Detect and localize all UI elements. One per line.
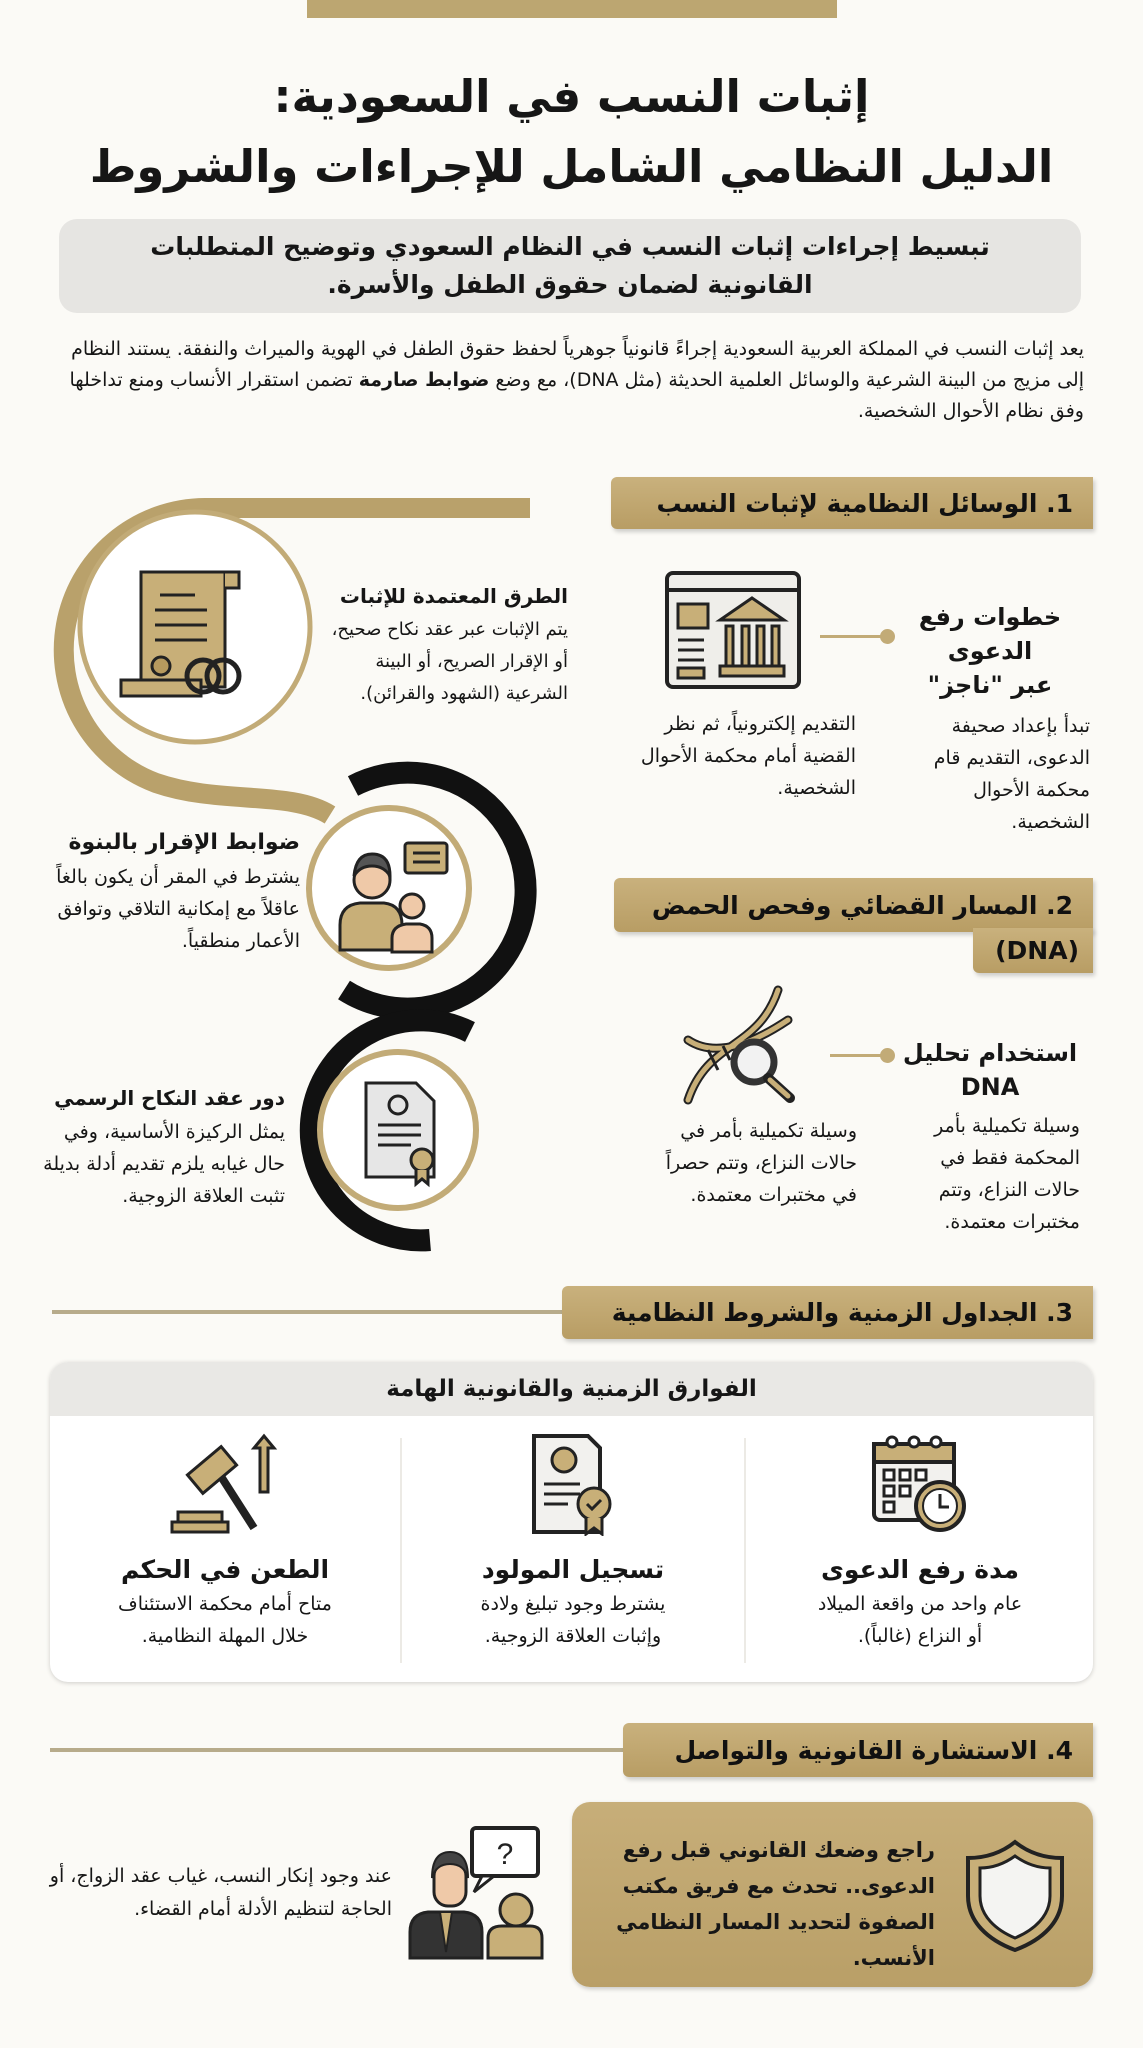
text: marriage contract role: دور عقد النكاح الرسمي — [54, 1086, 285, 1110]
icon: DNA with magnifier — [684, 986, 795, 1104]
circle 3 — [320, 1052, 476, 1208]
section 2 header: 2. المسار القضائي وفحص الحمض — [652, 890, 1073, 920]
section 3 divider line — [52, 1310, 564, 1314]
intro paragraph: يعد إثبات النسب في المملكة العربية السعودية إجراءً قانونياً جوهرياً لحفظ حقوق الطفل في الهوية والميراث والنفقة. يستند النظام إلى مزيج من البينة الشرعية والوسائل العلمية الحديثة (مثل DNA)، مع وضع ضوابط صارمة تضمن استقرار الأنساب ومنع تداخلها وفق نظام الأحوال الشخصية. — [69, 338, 1084, 422]
card text: راجع وضعك القانوني قبل رفع الدعوى.. تحدث مع فريق مكتب الصفوة لتحديد المسار النظامي الأنسب. — [616, 1838, 935, 1970]
section 2 header — [614, 878, 1098, 978]
text: electronic submission: التقديم إلكترونياً، ثم نظر القضية أمام محكمة الأحوال الشخصية. — [641, 713, 856, 799]
black arc circle 2 — [344, 773, 526, 1009]
text: acknowledgment rules: يشترط في المقر أن يكون بالغاً عاقلاً مع إمكانية التلاقي وتوافق الأعمار منطقياً. — [56, 866, 300, 952]
column: filing period: أو النزاع (غالباً). — [858, 1625, 982, 1647]
icon: shield — [966, 1840, 1064, 1952]
text: najiz steps — [919, 603, 1090, 833]
title: إثبات النسب في السعودية: — [274, 70, 869, 123]
column: filing period — [818, 1436, 1022, 1647]
title: الدليل النظامي الشامل للإجراءات والشروط — [90, 140, 1053, 193]
text: acknowledgment rules: ضوابط الإقرار بالبنوة — [69, 830, 300, 855]
black arc circle 3 — [311, 1020, 470, 1240]
text: DNA usage: وسيلة تكميلية بأمر المحكمة فقط في حالات النزاع، وتتم مختبرات معتمدة. — [934, 1115, 1080, 1233]
circle 2 — [309, 808, 469, 968]
card header: الفوارق الزمنية والقانونية الهامة — [386, 1376, 757, 1402]
text: approved methods: يتم الإثبات عبر عقد نكاح صحيح، أو الإقرار الصريح، أو البينة الشرعية (الشهود والقرائن). — [332, 619, 568, 704]
column: birth registration: تسجيل المولود — [482, 1555, 664, 1584]
column: birth registration: وإثبات العلاقة الزوجية. — [485, 1625, 661, 1647]
icon: document with badge — [532, 1434, 612, 1536]
icon: scroll with rings — [121, 572, 239, 696]
card header — [50, 1362, 1093, 1416]
icon: calendar clock — [872, 1436, 966, 1532]
section 4 header — [623, 1723, 1093, 1777]
gold consultation card — [572, 1802, 1093, 1987]
subtitle box: القانونية لضمان حقوق الطفل والأسرة. — [327, 270, 813, 299]
gold band — [64, 508, 530, 815]
top gold bar — [307, 0, 837, 18]
section 2 header: (DNA) — [995, 936, 1079, 965]
text: najiz steps: تبدأ بإعداد صحيفة الدعوى، التقديم قام محكمة الأحوال الشخصية. — [934, 715, 1090, 833]
connector 2 — [830, 1054, 886, 1057]
column: appeal: خلال المهلة النظامية. — [142, 1625, 308, 1647]
icon: parent and child — [340, 843, 447, 952]
text: DNA usage: استخدام تحليل — [903, 1039, 1077, 1067]
text: najiz steps: الدعوى — [948, 637, 1032, 665]
text: najiz steps: عبر "ناجز" — [928, 671, 1052, 699]
circle 1 — [80, 512, 310, 742]
section 4 header: 4. الاستشارة القانونية والتواصل — [674, 1736, 1073, 1764]
icon: lawyer with client — [408, 1826, 544, 1960]
section 4 divider line — [50, 1748, 625, 1752]
connector 1 — [820, 635, 884, 638]
text: DNA usage — [903, 1039, 1080, 1233]
column: filing period: مدة رفع الدعوى — [821, 1555, 1019, 1584]
text: when to consult: عند وجود إنكار النسب، غياب عقد الزواج، أو الحاجة لتنظيم الأدلة أمام القضاء. — [50, 1865, 392, 1920]
icon: lawyer with client: ? — [497, 1838, 513, 1871]
icon: certificate — [366, 1083, 434, 1184]
column: filing period: عام واحد من واقعة الميلاد — [818, 1593, 1022, 1615]
text: marriage contract role: يمثل الركيزة الأساسية، وفي حال غيابه يلزم تقديم أدلة بديلة تثبت العلاقة الزوجية. — [43, 1121, 285, 1207]
text: DNA supplementary: وسيلة تكميلية بأمر في حالات النزاع، وتتم حصراً في مختبرات معتمدة. — [666, 1120, 857, 1206]
column: birth registration: يشترط وجود تبليغ ولادة — [481, 1593, 665, 1615]
subtitle box: تبسيط إجراءات إثبات النسب في النظام السعودي وتوضيح المتطلبات — [150, 232, 990, 261]
subtitle box — [59, 219, 1081, 313]
column: birth registration — [481, 1434, 665, 1647]
section 1 header — [611, 477, 1093, 529]
title — [90, 70, 1053, 193]
text: approved methods: الطرق المعتمدة للإثبات — [340, 584, 568, 608]
icon: gavel with arrow — [170, 1434, 278, 1534]
section 3 header — [562, 1286, 1093, 1339]
icon: browser court — [665, 571, 801, 689]
text: najiz steps: خطوات رفع — [919, 603, 1061, 631]
section 3 header: 3. الجداول الزمنية والشروط النظامية — [612, 1298, 1073, 1327]
column: appeal: متاح أمام محكمة الاستئناف — [118, 1593, 332, 1615]
column: appeal: الطعن في الحكم — [121, 1555, 329, 1584]
timeline card — [50, 1362, 1093, 1682]
section 1 header: 1. الوسائل النظامية لإثبات النسب — [656, 488, 1073, 518]
left graphic: connected circles — [54, 498, 537, 1252]
text: DNA usage: DNA — [961, 1073, 1019, 1101]
column: appeal — [118, 1434, 332, 1647]
